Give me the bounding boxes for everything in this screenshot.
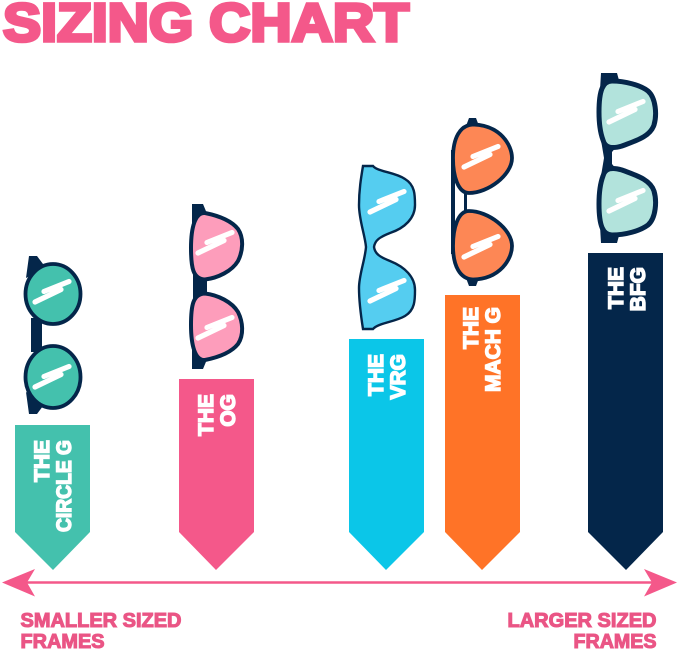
bar: the vrg: THE — [365, 354, 388, 396]
label: smaller sized frames: SMALLER SIZED — [20, 610, 182, 632]
label: smaller sized frames — [20, 610, 182, 650]
bar: the og: THE — [195, 394, 218, 436]
bar: the og: OG — [217, 394, 240, 427]
glasses: the circle g — [26, 256, 80, 414]
bar: the circle g: CIRCLE G — [53, 440, 76, 532]
double-headed size arrow — [2, 569, 677, 596]
label: larger sized frames: LARGER SIZED — [508, 610, 656, 632]
bar: the mach g — [445, 295, 520, 570]
bar: the vrg — [349, 339, 424, 570]
bar: the bfg: BFG — [627, 267, 650, 311]
bar: the vrg: VRG — [387, 354, 410, 400]
label: larger sized frames — [508, 610, 656, 650]
bar: the bfg — [588, 253, 663, 570]
glasses: the vrg — [359, 166, 415, 329]
glasses: the bfg — [599, 73, 656, 243]
bar: the bfg: THE — [605, 267, 628, 309]
bar: the mach g: THE — [460, 307, 483, 349]
glasses: the og — [191, 204, 242, 369]
bar: the mach g: MACH G — [482, 307, 505, 392]
bar: the circle g — [15, 425, 90, 570]
glasses: the mach g — [451, 118, 512, 286]
bar: the circle g: THE — [31, 440, 54, 482]
bar: the og — [179, 379, 254, 570]
